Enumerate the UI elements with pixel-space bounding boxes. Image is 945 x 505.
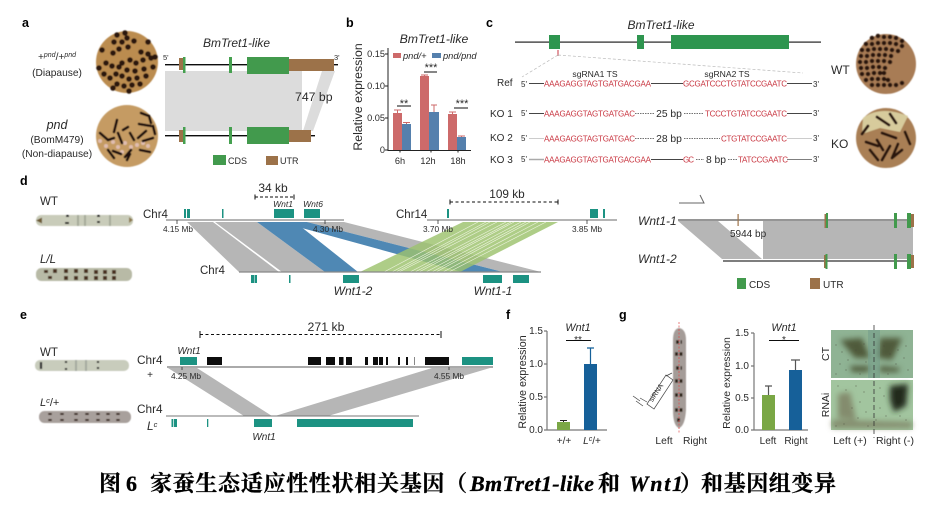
UTR and CDS marks [738, 213, 914, 269]
panel letter b: b [346, 16, 354, 30]
axis labels: 0.05 [367, 113, 385, 123]
tick labels: 1.5 [529, 326, 543, 337]
legend: CDS [228, 156, 247, 166]
Wnt1 lower label: Wnt1 [252, 432, 276, 443]
scale 109 kb: 109 kb [489, 187, 525, 201]
genotype label diapause: /+ [56, 52, 64, 63]
teal genes [184, 209, 605, 283]
lower Chr4 label: Chr4 [200, 265, 226, 277]
photo: diapause eggs [96, 31, 158, 93]
target site marker [557, 50, 559, 56]
row labels: Ref [497, 78, 513, 89]
midline [678, 322, 680, 433]
syringe with siRNA [633, 373, 673, 409]
genotype label non-diapause [22, 118, 92, 160]
sequences: GC [683, 156, 694, 164]
L/L label: L/L [40, 254, 56, 266]
deletion size: 5944 bp [730, 229, 767, 240]
panel letter a: a [22, 16, 30, 30]
significance: ** [400, 98, 409, 110]
tick labels [529, 326, 601, 447]
genotype label non-diapause: (BomM479) [30, 135, 84, 146]
alignment ribbons [678, 221, 913, 259]
sequences [544, 80, 788, 164]
figure caption: BmTret1-like [469, 471, 594, 496]
y axis title: Relative expression [351, 43, 365, 151]
scale ticks [177, 220, 587, 224]
panel d: synteny [20, 174, 617, 298]
ribbons [168, 368, 490, 416]
bars [557, 364, 597, 430]
tick labels: 1.0 [529, 359, 543, 370]
scale 109 kb [450, 187, 558, 204]
legend [737, 278, 844, 291]
y axis title: Relative expression [517, 335, 529, 429]
significance [397, 62, 469, 110]
gene model pnd [165, 127, 315, 144]
genotype label non-diapause: (Non-diapause) [22, 149, 92, 160]
strand marks: 3' [813, 80, 819, 89]
panel letter c: c [486, 16, 493, 30]
coordinates: 4.55 Mb [434, 371, 464, 381]
Chr labels: + [147, 370, 153, 381]
axis labels: 0.10 [367, 81, 385, 91]
row labels: KO 2 [490, 133, 513, 144]
scale 34 kb: 34 kb [258, 181, 288, 195]
panel g: RNAi [619, 308, 914, 447]
scale 271 kb: 271 kb [308, 320, 345, 334]
Left Right labels: Left [655, 436, 673, 447]
sgRNA labels [572, 69, 750, 79]
tick labels: 0.0 [529, 425, 543, 436]
strand marks: 3' [813, 134, 819, 143]
Wnt1-2 label: Wnt1-2 [334, 284, 373, 298]
zoom guide lines [522, 55, 803, 77]
figure caption: 6 [126, 471, 137, 496]
strand marks: 5' [163, 53, 169, 62]
tick labels: /+ [592, 436, 601, 447]
figure caption: 家蚕生态适应性性状相关基因（ [150, 471, 468, 496]
axis labels: 0 [380, 145, 385, 155]
row labels: KO 1 [490, 109, 513, 120]
Lc label: c [46, 396, 50, 405]
tick labels: +/+ [557, 436, 571, 447]
Chr labels: c [154, 420, 158, 429]
tick labels: 0.5 [735, 393, 749, 404]
chromosome lines [167, 366, 493, 368]
sequences: GCGATCCCTGTATCCGAATC [683, 80, 787, 88]
Right (-) label: Right (-) [876, 435, 914, 447]
WT label: WT [40, 347, 58, 359]
direction arrow [679, 195, 704, 203]
genotype label diapause [32, 52, 82, 79]
coordinates [163, 224, 602, 234]
tick labels: c [589, 436, 593, 443]
legend: pnd/pnd [442, 51, 477, 61]
significance: *** [456, 98, 469, 110]
photo: WT larva [35, 360, 129, 371]
genotype label diapause: pnd [63, 52, 77, 59]
figure caption: 图 [99, 471, 121, 496]
Chr labels: Chr4 [137, 353, 163, 367]
gene labels: Wnt6 [303, 199, 323, 209]
panel f: Wnt1 expression [506, 308, 607, 447]
error bars [765, 360, 800, 395]
axes [385, 48, 471, 152]
Lc label: L [40, 397, 46, 409]
sequences: AAAGAGGTAGTGATGAC [544, 134, 635, 144]
KO label: KO [831, 137, 848, 151]
tick labels: L [583, 436, 589, 447]
blue inversion ribbons [257, 222, 503, 272]
Wnt1-1 label: Wnt1-1 [638, 214, 677, 228]
panel e: Lc structural variant [20, 308, 493, 443]
sgRNA labels: sgRNA2 TS [704, 69, 750, 79]
coordinates: 4.25 Mb [171, 371, 201, 381]
Chr labels [137, 353, 163, 433]
Wnt1-2 label: Wnt1-2 [638, 252, 677, 266]
genotype label diapause: + [38, 52, 44, 63]
gray synteny ribbons [187, 222, 541, 272]
panel letter g: g [619, 308, 627, 322]
Left Right labels [655, 436, 707, 447]
sgRNA labels: sgRNA1 TS [572, 69, 618, 79]
Chr14 label: Chr14 [396, 209, 428, 221]
Chr4 label: Chr4 [143, 209, 169, 221]
y axis title: Relative expression [721, 337, 733, 429]
gene model [515, 35, 821, 49]
Chr labels: Chr4 [137, 402, 163, 416]
figure caption: ） [680, 471, 702, 496]
WT label: WT [40, 196, 58, 208]
bars [762, 370, 802, 430]
panel letter e: e [20, 308, 27, 322]
sequences: TCCCTGTATCCGAATC [705, 110, 787, 118]
deletion sizes [656, 109, 726, 166]
coordinates: 3.70 Mb [423, 224, 453, 234]
legend: CDS [749, 280, 770, 291]
error bars [394, 75, 465, 137]
syringe with siRNA: siRNA [648, 383, 665, 403]
RNAi label: RNAi [820, 393, 832, 417]
photo: WT eggs [856, 34, 916, 94]
photo: L/L larva [36, 268, 132, 281]
significance: * [782, 335, 786, 346]
axis labels: 0.15 [367, 49, 385, 59]
gene title: BmTret1-like [203, 36, 270, 50]
significance [769, 335, 799, 346]
sequences: AAAGAGGTAGTGATGACGAA [544, 156, 652, 164]
green inversion ribbon [360, 222, 558, 272]
Chr labels: L [147, 419, 154, 433]
Left Right labels: Right [683, 436, 707, 447]
coordinates: 4.30 Mb [313, 224, 343, 234]
deletion sizes: 28 bp [656, 134, 682, 145]
strand marks: 5' [521, 80, 527, 89]
strand marks: 5' [521, 109, 527, 118]
coordinates [171, 367, 464, 381]
conserved region ribbon [165, 71, 302, 131]
legend: pnd/+ [402, 51, 427, 61]
legend [213, 155, 299, 166]
photo: WT larva [36, 215, 133, 226]
coordinates: 3.85 Mb [572, 224, 602, 234]
tick labels: 0.0 [735, 425, 749, 436]
sequences: AAAGAGGTAGTGATGACGAA [544, 80, 652, 88]
3' UTR ribbon [303, 71, 335, 131]
gene labels [273, 199, 323, 209]
gene lines [678, 219, 913, 221]
strand marks: 3' [334, 53, 340, 62]
scale 271 kb [200, 320, 441, 338]
teal genes [172, 357, 493, 427]
error bars [587, 348, 594, 364]
strand marks: 5' [521, 155, 527, 164]
wing photo RNAi [831, 380, 913, 430]
genotype label diapause: pnd [43, 52, 57, 59]
deletion size: 747 bp [295, 90, 333, 104]
inserted black segments [207, 357, 449, 365]
panel c: CRISPR knockout [486, 16, 916, 168]
bars [393, 76, 466, 150]
dashed midline [873, 325, 875, 438]
tick labels [735, 328, 808, 447]
axes [751, 333, 808, 430]
panel letter d: d [20, 174, 28, 188]
sequences: CTGTATCCGAATC [721, 134, 787, 144]
Left (+) label: Left (+) [833, 435, 867, 447]
panel letter f: f [506, 308, 511, 322]
connecting lines [529, 84, 812, 160]
axis labels [367, 49, 466, 166]
figure caption: 和 [598, 471, 620, 496]
significance: *** [425, 62, 438, 74]
strand marks: 3' [813, 109, 819, 118]
axis labels: 12h [420, 156, 436, 166]
panel a: BmTret1-like gene structure [22, 16, 340, 167]
row labels: KO 3 [490, 155, 513, 166]
deletion sizes: 8 bp [706, 155, 726, 166]
gene labels: Wnt1 [273, 199, 293, 209]
chart title: Wnt1 [565, 322, 591, 334]
scale 34 kb [255, 181, 294, 200]
wing photo CT [831, 330, 913, 378]
genotype label non-diapause: pnd [46, 118, 68, 132]
CT label: CT [820, 346, 832, 361]
photo: KO larvae [856, 108, 916, 168]
coordinates: 4.15 Mb [163, 224, 193, 234]
tick labels: 1.5 [735, 328, 749, 339]
axes [544, 331, 607, 430]
tick labels: 0.5 [529, 392, 543, 403]
Lc label: /+ [50, 397, 59, 409]
chart title: Wnt1 [771, 322, 797, 334]
Wnt1-1 label: Wnt1-1 [474, 284, 512, 298]
WT label: WT [831, 63, 850, 77]
gene model wild type [165, 57, 338, 74]
tick labels: 1.0 [735, 361, 749, 372]
Wnt1 upper label: Wnt1 [177, 346, 201, 357]
significance: ** [574, 335, 582, 346]
figure caption: Wnt1 [629, 471, 683, 496]
axis labels: 18h [450, 156, 466, 166]
axis labels: 6h [395, 156, 405, 166]
genotype label diapause: (Diapause) [32, 68, 82, 79]
strand marks [163, 53, 340, 62]
legend: UTR [823, 280, 844, 291]
row labels [490, 78, 513, 166]
strand marks: 5' [521, 134, 527, 143]
chromosome lines [166, 220, 617, 272]
panel b: expression bar chart [346, 16, 477, 166]
tick labels: Left [760, 436, 777, 447]
sequences: TATCCGAATC [738, 156, 788, 164]
tick labels: Right [784, 436, 808, 447]
legend: UTR [280, 156, 299, 166]
gene title: BmTret1-like [627, 18, 695, 32]
sequences: AAAGAGGTAGTGATGAC [544, 110, 635, 118]
panel d right: Wnt1 paralog comparison [638, 195, 914, 291]
photo: non-diapause larvae [96, 105, 158, 167]
photo: injected larva [673, 328, 686, 428]
legend [393, 51, 477, 61]
photo: Lc larva [39, 411, 131, 423]
chart title: BmTret1-like [400, 32, 469, 46]
deletion sizes: 25 bp [656, 109, 682, 120]
figure caption: 和基因组变异 [701, 471, 837, 496]
strand marks [521, 80, 819, 164]
strand marks: 3' [813, 155, 819, 164]
